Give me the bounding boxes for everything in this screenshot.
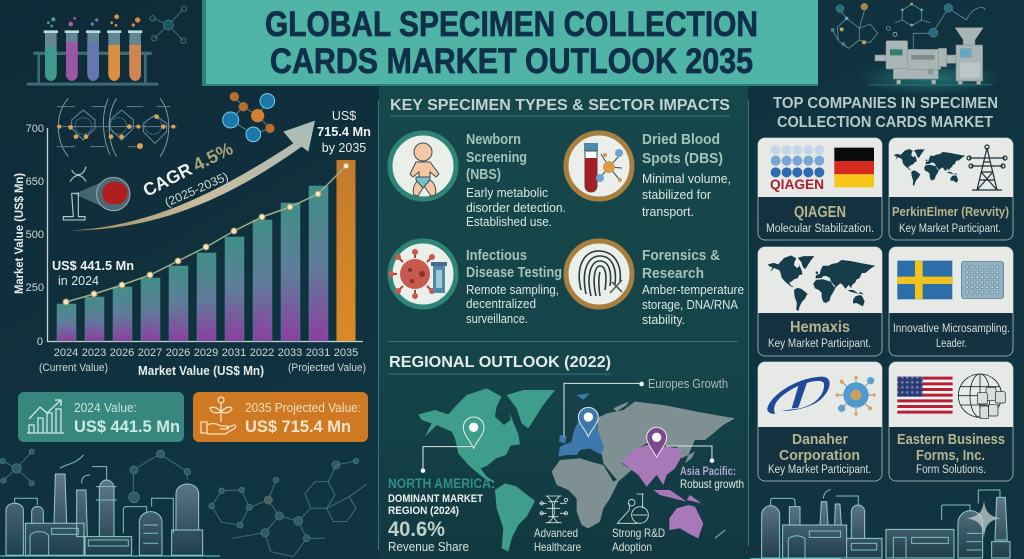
icon: virus <box>388 241 456 307</box>
text: forensics and research: stability. <box>642 313 685 327</box>
x axis labels: 2029 <box>194 347 218 359</box>
icon: test tubes rack <box>27 6 187 86</box>
heading: top companies <box>773 95 998 131</box>
callout: 2024 value: in 2024 <box>58 274 99 288</box>
trend line <box>63 163 349 305</box>
icon: blood tube <box>566 133 632 199</box>
text: forensics and research: storage, DNA/RNA <box>642 298 739 312</box>
text: 2024 value <box>74 400 180 436</box>
description: Leader. <box>936 338 967 350</box>
text: forensics and research: Forensics & <box>642 247 720 264</box>
icon: growth chart <box>27 400 64 433</box>
panel: 2024 value box <box>18 392 184 442</box>
label: Asia Pacific: Robust growth <box>680 477 744 491</box>
heading: key specimen types: KEY SPECIMEN TYPES & SECTOR IMPACTS <box>390 97 730 114</box>
icon: hand with plant <box>201 397 236 434</box>
x axis notes <box>39 362 366 374</box>
x axis labels: 2024 <box>54 347 78 359</box>
text: dried blood spots: Minimal volume, <box>642 172 731 186</box>
title line 2: CARDS MARKET OUTLOOK 2035 <box>270 42 753 81</box>
x axis labels: 2033 <box>278 347 302 359</box>
text: 2035 value: US$ 715.4 Mn <box>245 417 351 436</box>
text: dried blood spots <box>642 131 731 219</box>
x axis labels: 2022 <box>250 347 274 359</box>
card: Danaher <box>758 362 882 481</box>
y axis labels: 700 <box>26 123 44 135</box>
text: dried blood spots: stabilized for <box>642 188 711 202</box>
text: forensics and research: Research <box>642 265 704 282</box>
x axis labels: 2023 <box>82 347 106 359</box>
illustration: bottom-left factory <box>0 449 220 557</box>
x axis labels <box>54 347 358 359</box>
callout: North America: Revenue Share <box>388 540 469 554</box>
panel: 2035 value box <box>193 392 368 442</box>
name: Hemaxis <box>790 319 850 336</box>
icon: world map <box>768 256 875 311</box>
description: Key Market Participant. <box>899 223 1001 235</box>
region: continents <box>418 388 735 552</box>
description: Molecular Stabilization. <box>766 223 874 235</box>
x axis notes: (Current Value) <box>39 362 108 374</box>
CAGR label: 4.5% <box>190 138 236 175</box>
callout: North America <box>388 475 495 554</box>
arrow: growth CAGR <box>68 121 315 231</box>
description: Key Market Participant. <box>768 338 871 350</box>
title line 1: GLOBAL SPECIMEN COLLECTION <box>265 5 758 44</box>
label: strong R&D: Strong R&D <box>612 526 665 540</box>
name <box>897 431 1005 464</box>
x axis notes: (Projected Value) <box>288 362 366 374</box>
icon: DNA microscope with blood sample <box>63 167 130 220</box>
icon: Swedish flag and microplate <box>897 261 1003 299</box>
icon: newborn <box>390 133 456 199</box>
map pin: Europe <box>578 407 598 437</box>
text: newborn screening: Early metabolic <box>466 186 548 200</box>
x axis labels: 2026 <box>110 347 134 359</box>
text: newborn screening: Newborn <box>466 131 521 148</box>
x axis labels: 2031 <box>306 347 330 359</box>
x axis labels: 2027 <box>138 347 162 359</box>
bars <box>57 186 328 341</box>
callout: 2035 value: 715.4 Mn <box>317 124 371 139</box>
label: Europe growth: Europes Growth <box>648 377 728 391</box>
heading: top companies: COLLECTION CARDS MARKET <box>777 114 993 131</box>
logo: Danaher <box>767 376 876 416</box>
card: QIAGEN <box>758 138 882 240</box>
description: Innovative Microsampling. <box>893 323 1010 335</box>
label: strong R&D: Adoption <box>612 540 652 554</box>
text: dried blood spots: Spots (DBS) <box>642 150 723 167</box>
CAGR label <box>140 138 236 201</box>
card: Hemaxis <box>758 247 882 356</box>
text: newborn screening: disorder detection. <box>466 201 566 215</box>
icon: atoms cluster <box>223 92 275 142</box>
panel: centre background <box>379 86 748 559</box>
CAGR label: CAGR <box>140 159 195 201</box>
icon: molecule network <box>57 98 177 157</box>
y axis labels: 250 <box>26 282 44 294</box>
callout: 2024 value <box>52 258 134 288</box>
description <box>893 323 1010 350</box>
illustration: bottom hexagon molecules <box>209 458 367 557</box>
icon: R&D flask <box>617 494 648 523</box>
x axis labels: 2035 <box>334 347 358 359</box>
label: strong R&D <box>612 526 665 554</box>
sparkle watermark <box>967 500 1001 538</box>
x axis labels: 2026 <box>166 347 190 359</box>
y axis labels <box>26 123 44 348</box>
callout: North America: NORTH AMERICA: <box>388 475 495 491</box>
map pin: Asia Pacific <box>647 427 667 457</box>
text: 2035 value <box>245 400 361 436</box>
label: Asia Pacific <box>680 466 744 491</box>
heading: regional outlook: REGIONAL OUTLOOK (2022) <box>389 354 611 371</box>
y axis title: Market Value (US$ Mn) <box>14 173 26 294</box>
y axis labels: 0 <box>37 336 43 348</box>
heading: top companies: TOP COMPANIES IN SPECIMEN <box>773 95 998 112</box>
label: Asia Pacific: Asia Pacific: <box>680 466 736 478</box>
text: infectious disease testing: surveillance. <box>466 312 528 326</box>
label: advanced healthcare <box>534 526 581 554</box>
card: PerkinElmer <box>889 138 1013 240</box>
icon: fingerprint <box>566 241 632 307</box>
card: QIAGEN: QIAGEN <box>770 176 824 192</box>
text: newborn screening: (NBS) <box>466 166 501 183</box>
text: dried blood spots: transport. <box>642 205 694 219</box>
x axis labels: 2031 <box>222 347 246 359</box>
icon: US flag and globe <box>897 374 1005 419</box>
callout: 2024 value: US$ 441.5 Mn <box>52 258 134 273</box>
text: newborn screening: Screening <box>466 149 527 166</box>
y axis labels: 650 <box>26 176 44 188</box>
callout: North America: 40.6% <box>388 518 445 541</box>
callout: North America: REGION (2024) <box>388 505 459 517</box>
name <box>779 431 860 464</box>
name: Eastern Business <box>897 431 1005 448</box>
illustration: bottom-right factory <box>750 489 1010 559</box>
card: Eastern Business Forms <box>889 362 1013 481</box>
callout: 2035 value: by 2035 <box>322 141 366 155</box>
x axis title: Market Value (US$ Mn) <box>138 364 264 378</box>
name: QIAGEN <box>794 204 846 221</box>
map pin: North America <box>463 417 484 448</box>
icon: world map and tower <box>894 145 1007 190</box>
bar: 2035 projected <box>336 160 356 341</box>
callout: 2035 value: US$ <box>332 109 356 123</box>
name: Forms, Inc. <box>916 447 985 464</box>
callout: 2035 value <box>317 109 371 155</box>
logo: QIAGEN with German flag <box>771 145 874 187</box>
title banner <box>202 0 818 86</box>
label: advanced healthcare: Advanced <box>534 526 578 540</box>
icon: DNA healthcare <box>540 496 568 523</box>
text: infectious disease testing: Disease Testing <box>466 264 562 281</box>
illustration: top-right molecules and machine <box>831 3 1003 95</box>
text: infectious disease testing: Remote sampling, <box>466 283 559 297</box>
text: infectious disease testing: decentralized <box>466 297 536 311</box>
callout: North America: DOMINANT MARKET <box>388 493 483 505</box>
text: 2035 value: 2035 Projected Value: <box>245 400 361 415</box>
text: newborn screening <box>466 131 566 229</box>
y axis labels: 500 <box>26 229 44 241</box>
description: Key Market Participant. <box>768 464 871 476</box>
name: Corporation <box>779 447 860 464</box>
text: forensics and research <box>642 247 744 327</box>
text: newborn screening: Established use. <box>466 215 552 229</box>
CAGR period: (2025-2035) <box>163 169 230 210</box>
chart: market value bars <box>14 123 366 378</box>
text: 2024 value: 2024 Value: <box>74 400 137 415</box>
text: forensics and research: Amber-temperature <box>642 283 744 297</box>
text: dried blood spots: Dried Blood <box>642 131 720 148</box>
text: infectious disease testing <box>466 247 562 326</box>
text: 2024 value: US$ 441.5 Mn <box>74 417 180 436</box>
name: Danaher <box>792 431 848 448</box>
name: PerkinElmer (Revvity) <box>892 205 1009 219</box>
chart: world map <box>418 382 735 552</box>
text: infectious disease testing: Infectious <box>466 247 527 264</box>
label: advanced healthcare: Healthcare <box>534 540 581 554</box>
description: Form Solutions. <box>916 464 986 476</box>
card: Microsampling <box>889 247 1013 356</box>
